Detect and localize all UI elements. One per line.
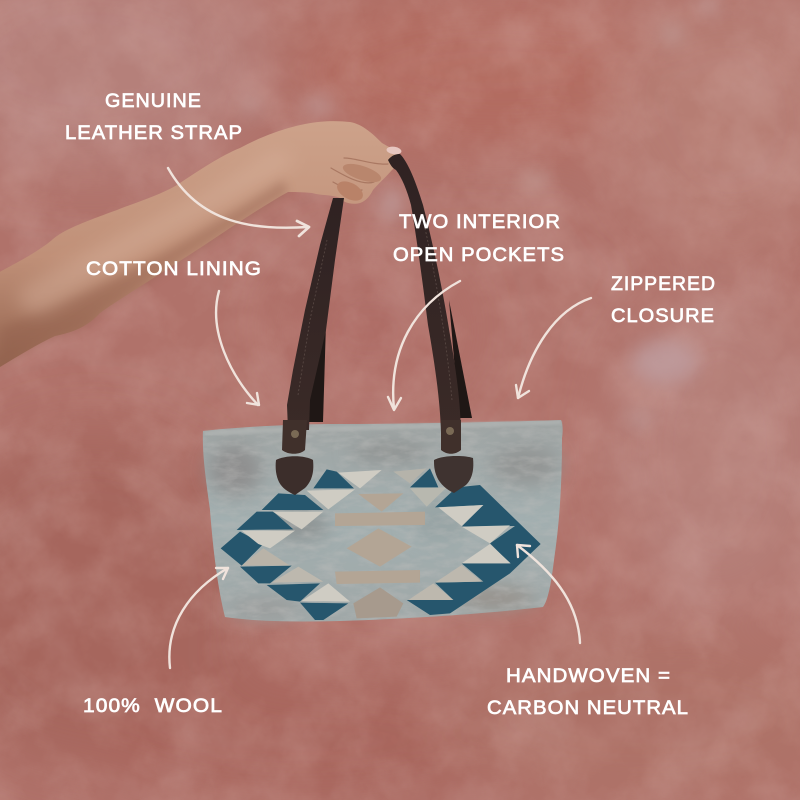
- arrow: two interior pockets: [388, 281, 460, 410]
- back straps: [304, 290, 472, 422]
- label: handwoven carbon neutral: CARBON NEUTRAL: [487, 697, 689, 719]
- fingernail: [386, 146, 402, 155]
- bag mottled wool: [209, 442, 559, 616]
- label: handwoven carbon neutral: HANDWOVEN =: [506, 665, 671, 687]
- teal left steps: [221, 468, 541, 620]
- tan center motifs: [335, 493, 425, 618]
- label: zippered closure: CLOSURE: [611, 305, 715, 327]
- arrow: zippered closure: [516, 298, 591, 398]
- label: 100% wool: 100% WOOL: [83, 695, 223, 717]
- leather tab: right: [434, 420, 473, 493]
- fingers: [331, 158, 388, 190]
- wool texture: [200, 415, 565, 625]
- arm highlight: [19, 150, 300, 313]
- label: zippered closure: ZIPPERED: [611, 273, 716, 295]
- cream triangles: [242, 468, 511, 602]
- label: genuine leather strap: LEATHER STRAP: [65, 122, 243, 144]
- arrow: cotton lining: [216, 291, 259, 405]
- woven pattern: [221, 468, 541, 620]
- bag body: [200, 415, 565, 625]
- leather tab: left: [276, 420, 313, 495]
- bag top seam: [204, 422, 561, 434]
- front strap: left: [287, 198, 344, 430]
- arrow: handwoven: [517, 545, 580, 643]
- label: two interior open pockets: TWO INTERIOR: [399, 211, 561, 233]
- label: cotton lining: COTTON LINING: [86, 258, 262, 280]
- label: genuine leather strap: GENUINE: [105, 90, 202, 112]
- teal right steps: [410, 468, 438, 487]
- arrow: wool: [169, 568, 228, 668]
- arm shading: [0, 180, 288, 367]
- arrow: genuine leather strap: [168, 168, 309, 236]
- arm and hand: [0, 121, 402, 367]
- label: two interior open pockets: OPEN POCKETS: [393, 244, 565, 266]
- front strap: right: [388, 154, 461, 432]
